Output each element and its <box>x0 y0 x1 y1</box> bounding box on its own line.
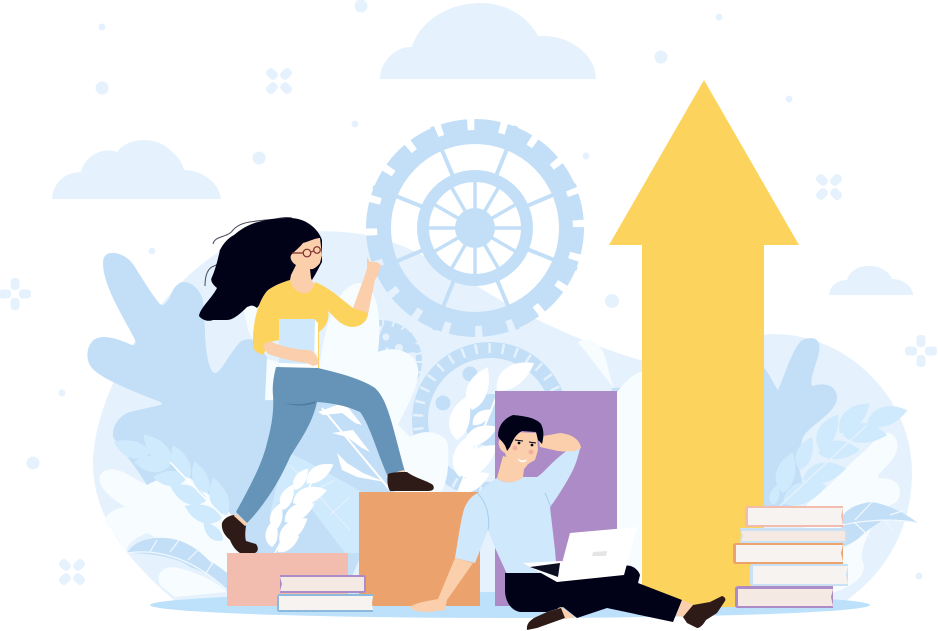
glasses <box>292 247 320 257</box>
small gear <box>343 323 419 399</box>
trousers <box>505 566 682 622</box>
book: blue <box>277 594 373 612</box>
ankle bottom <box>558 607 575 619</box>
book: pale blue thin <box>740 528 847 543</box>
sweater <box>455 448 580 574</box>
sprig: right pale <box>768 396 910 511</box>
book stack: right <box>733 506 848 608</box>
large leaf: right <box>755 338 837 510</box>
cheeks <box>512 446 534 454</box>
pink step <box>227 553 348 606</box>
pale blob: center behind woman <box>318 283 448 492</box>
book: orange <box>733 543 843 564</box>
pale blob: right <box>800 433 900 593</box>
front ankle <box>389 470 406 476</box>
forearm <box>410 558 473 612</box>
woman <box>199 217 434 553</box>
sleeve crease <box>477 493 551 530</box>
book: purple <box>280 575 366 593</box>
orange step <box>359 492 480 606</box>
laptop <box>523 527 637 582</box>
sprig: white center <box>445 353 539 497</box>
face and neck <box>289 238 322 295</box>
large leaf: left <box>87 253 395 592</box>
hair <box>498 415 543 451</box>
neck <box>497 456 525 482</box>
raised arm <box>353 257 381 314</box>
purple panel <box>495 391 617 606</box>
back shoe <box>222 515 258 553</box>
book: purple <box>735 586 833 608</box>
book: pink <box>745 506 843 527</box>
face <box>499 432 538 471</box>
pale veined leaf: under woman <box>270 452 362 553</box>
book <box>278 319 318 370</box>
veined leaf: bottom right <box>840 502 918 548</box>
back ankle <box>234 513 247 526</box>
shoe bottom <box>527 608 565 630</box>
book stack: left <box>277 575 373 612</box>
flying hair strands <box>205 217 292 286</box>
growth arrow <box>609 80 799 607</box>
man <box>410 415 725 630</box>
yellow shirt <box>253 280 368 368</box>
sprig: left pale <box>111 430 234 545</box>
sprig: white crescents behind leg <box>318 405 390 490</box>
pale strips beside woman <box>243 306 278 435</box>
pale blob: left bottom lobe <box>159 567 227 597</box>
cloud: top <box>380 3 596 79</box>
jeans crease <box>284 401 316 406</box>
shoe right <box>683 596 725 628</box>
forearm <box>263 342 319 366</box>
veined leaf: bottom left <box>127 538 227 591</box>
medium gear <box>418 348 562 492</box>
floor shadow <box>150 592 870 618</box>
small blue spikes beside purple panel <box>612 387 634 428</box>
cloud: right <box>829 266 913 295</box>
cloud: left <box>52 140 221 199</box>
book: blue <box>750 564 848 586</box>
pale blob: left lower <box>100 469 245 575</box>
background blob <box>93 231 912 605</box>
ankle right <box>676 600 694 617</box>
sprig: white lower <box>265 457 337 556</box>
raised forearm <box>538 433 581 452</box>
front shoe <box>387 472 434 491</box>
pale blob: right of purple panel <box>578 340 642 590</box>
eyes and smile <box>515 440 536 462</box>
jeans <box>236 367 405 523</box>
hair <box>199 218 322 321</box>
large gear <box>372 125 578 331</box>
